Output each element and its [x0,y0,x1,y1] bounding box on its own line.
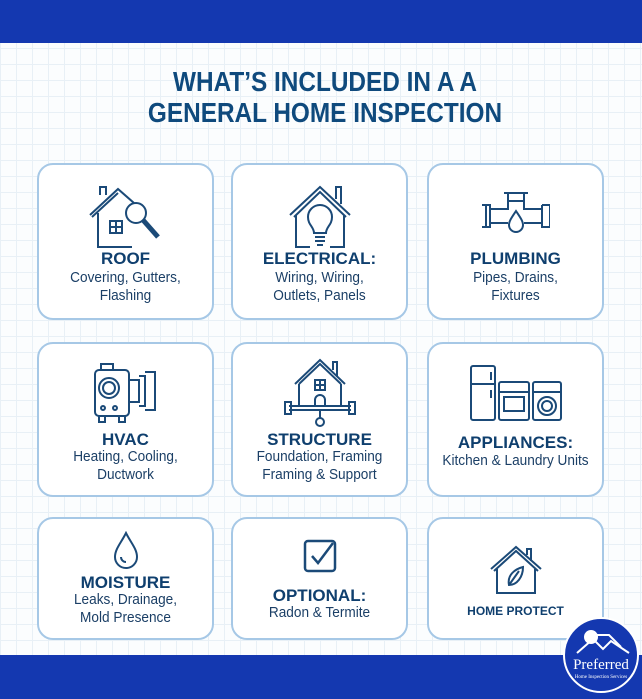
text: appliances: APPLIANCES: [458,433,573,452]
logo: preferred [563,617,639,693]
icon: house foundation [284,358,356,427]
icon: roofs [576,630,630,654]
icon: house with magnifier [89,186,160,248]
text: structure: STRUCTURE [267,430,372,449]
text: home protect: HOME PROTECT [467,604,564,618]
text: hvac: HVAC [102,430,149,449]
logo: preferred: Home Inspection Services [575,675,627,680]
text: plumbing: PLUMBING [470,249,561,268]
panel: structure: Foundation, Framing [257,449,382,465]
panel: plumbing [427,163,604,320]
icon: house bulb [289,186,351,248]
panel: moisture: Mold Presence [80,610,171,626]
title: WHAT’S INCLUDED IN A A [173,66,477,97]
icon: hvac unit [94,363,156,423]
text: roof: ROOF [101,249,150,268]
panel: electrical [231,163,408,320]
panel: electrical: Outlets, Panels [273,288,366,304]
text: moisture: MOISTURE [81,573,170,592]
panel: appliances [427,342,604,497]
text: electrical: ELECTRICAL: [263,249,376,268]
title [148,66,502,128]
panel: roof: Flashing [100,288,151,304]
panel: hvac [37,342,214,497]
panel: plumbing: Pipes, Drains, [473,270,558,286]
panel: moisture [37,517,214,640]
bottom band [0,655,642,699]
panel: appliances: Kitchen & Laundry Units [442,453,589,469]
icon: water drop [114,531,138,569]
icon: pipe drop [482,192,550,233]
logo: preferred: Preferred [573,657,629,673]
panel: optional: Radon & Termite [269,605,370,621]
panel: electrical: Wiring, Wiring, [275,270,364,286]
panel: home protect [427,517,604,640]
panel: plumbing: Fixtures [491,288,540,304]
top band [0,0,642,43]
icon: house leaf [490,546,542,594]
panel: hvac: Heating, Cooling, [73,449,178,465]
icon: appliances [470,365,562,421]
title: GENERAL HOME INSPECTION [148,97,502,128]
icon: checkbox [304,540,336,572]
panel: structure [231,342,408,497]
panel: structure: Framing & Support [262,467,377,483]
panel: roof [37,163,214,320]
panel: moisture: Leaks, Drainage, [74,592,177,608]
text: optional: OPTIONAL: [273,586,366,605]
panel: hvac: Ductwork [97,467,154,483]
panel: optional [231,517,408,640]
panel: roof: Covering, Gutters, [70,270,181,286]
